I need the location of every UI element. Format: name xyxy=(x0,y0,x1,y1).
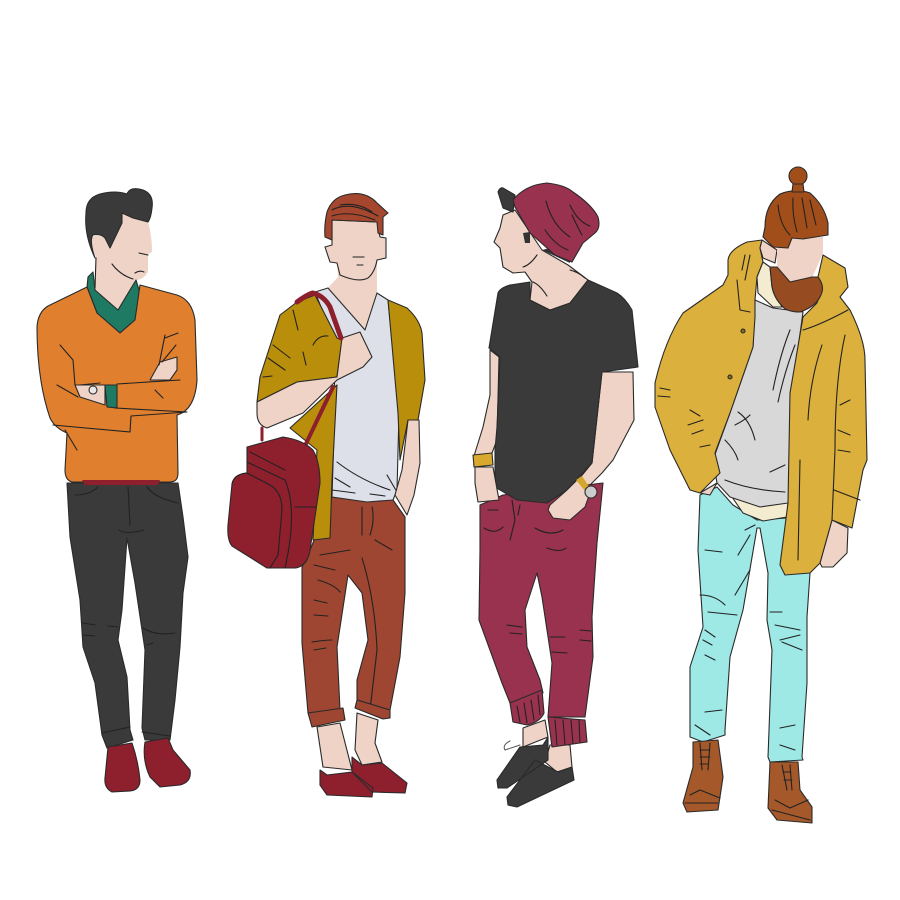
hair under beanie xyxy=(523,232,570,263)
pants xyxy=(479,483,603,717)
figure: man in orange sweater xyxy=(37,189,197,792)
lower bag strap xyxy=(303,387,333,450)
shoes xyxy=(320,757,407,797)
upper bag strap xyxy=(297,293,341,338)
cream hem xyxy=(732,497,788,521)
cardigan front xyxy=(290,385,337,540)
shirt wrinkles xyxy=(332,462,397,496)
hair xyxy=(325,194,388,240)
left arm xyxy=(474,350,499,456)
figure: man with maroon backpack xyxy=(228,194,425,797)
beanie xyxy=(513,183,599,262)
sleeve folds xyxy=(263,310,328,377)
waist ribbing xyxy=(82,480,160,485)
beard xyxy=(770,267,822,312)
right arm xyxy=(570,372,634,492)
ear xyxy=(760,240,777,263)
parka buttons xyxy=(728,329,745,379)
hand in pocket xyxy=(700,483,717,495)
ribbed cuffs xyxy=(510,690,587,747)
cap brim xyxy=(498,188,515,212)
cardigan right xyxy=(388,300,425,460)
shoelaces xyxy=(504,741,520,750)
neck and face xyxy=(494,210,588,310)
face lines xyxy=(95,253,148,288)
hoodie wrinkles xyxy=(725,330,795,492)
parka right xyxy=(780,255,867,575)
pants wrinkles and drawstring xyxy=(484,500,591,653)
cardigan sleeve xyxy=(257,295,342,402)
bun xyxy=(789,167,807,185)
backpack seams xyxy=(232,452,316,568)
shoes xyxy=(105,738,190,792)
face lines xyxy=(353,257,364,265)
tee xyxy=(489,280,638,503)
watch xyxy=(576,476,597,498)
parka left details xyxy=(658,255,750,447)
trouser cuffs xyxy=(308,700,390,727)
sweater xyxy=(37,285,197,482)
watch xyxy=(89,386,97,394)
right hand xyxy=(150,357,177,380)
hair xyxy=(86,189,152,258)
hand on pocket xyxy=(548,480,590,520)
parka left xyxy=(655,240,763,493)
sweater fold lines xyxy=(53,333,187,450)
face xyxy=(325,220,386,280)
hoodie xyxy=(713,300,803,507)
neck xyxy=(328,260,377,330)
left hand xyxy=(475,467,499,502)
jeans xyxy=(690,487,810,762)
boots xyxy=(683,740,812,823)
pants xyxy=(67,483,188,748)
hair xyxy=(763,191,828,248)
legs xyxy=(317,713,382,770)
t-shirt xyxy=(315,288,399,502)
jeans wrinkles xyxy=(695,525,802,750)
hand by parka xyxy=(820,520,848,567)
hood inner xyxy=(757,262,782,307)
shoes xyxy=(497,737,574,807)
legs xyxy=(523,720,572,772)
pants wrinkles xyxy=(75,487,178,736)
hand and wrist xyxy=(75,385,105,405)
hair strands xyxy=(778,198,816,235)
neck lines xyxy=(523,255,585,296)
figure: man in dark tee and beanie xyxy=(473,183,638,807)
bun tie xyxy=(792,184,804,192)
bracelet xyxy=(473,453,493,467)
backpack xyxy=(228,437,320,568)
right arm xyxy=(395,420,420,515)
face xyxy=(777,237,823,282)
small strap xyxy=(260,428,264,440)
forearm and hand xyxy=(257,332,372,428)
figure: man in mustard parka xyxy=(655,167,867,823)
neck and face xyxy=(90,213,152,310)
hair strands xyxy=(332,204,378,220)
beanie folds xyxy=(545,201,590,250)
boot laces xyxy=(685,743,810,820)
shirt collar xyxy=(87,272,140,333)
pants xyxy=(302,497,405,713)
parka right details xyxy=(798,310,860,560)
shirt cuff xyxy=(105,385,117,408)
pants wrinkles xyxy=(312,507,392,710)
cuff ribs xyxy=(517,695,580,745)
